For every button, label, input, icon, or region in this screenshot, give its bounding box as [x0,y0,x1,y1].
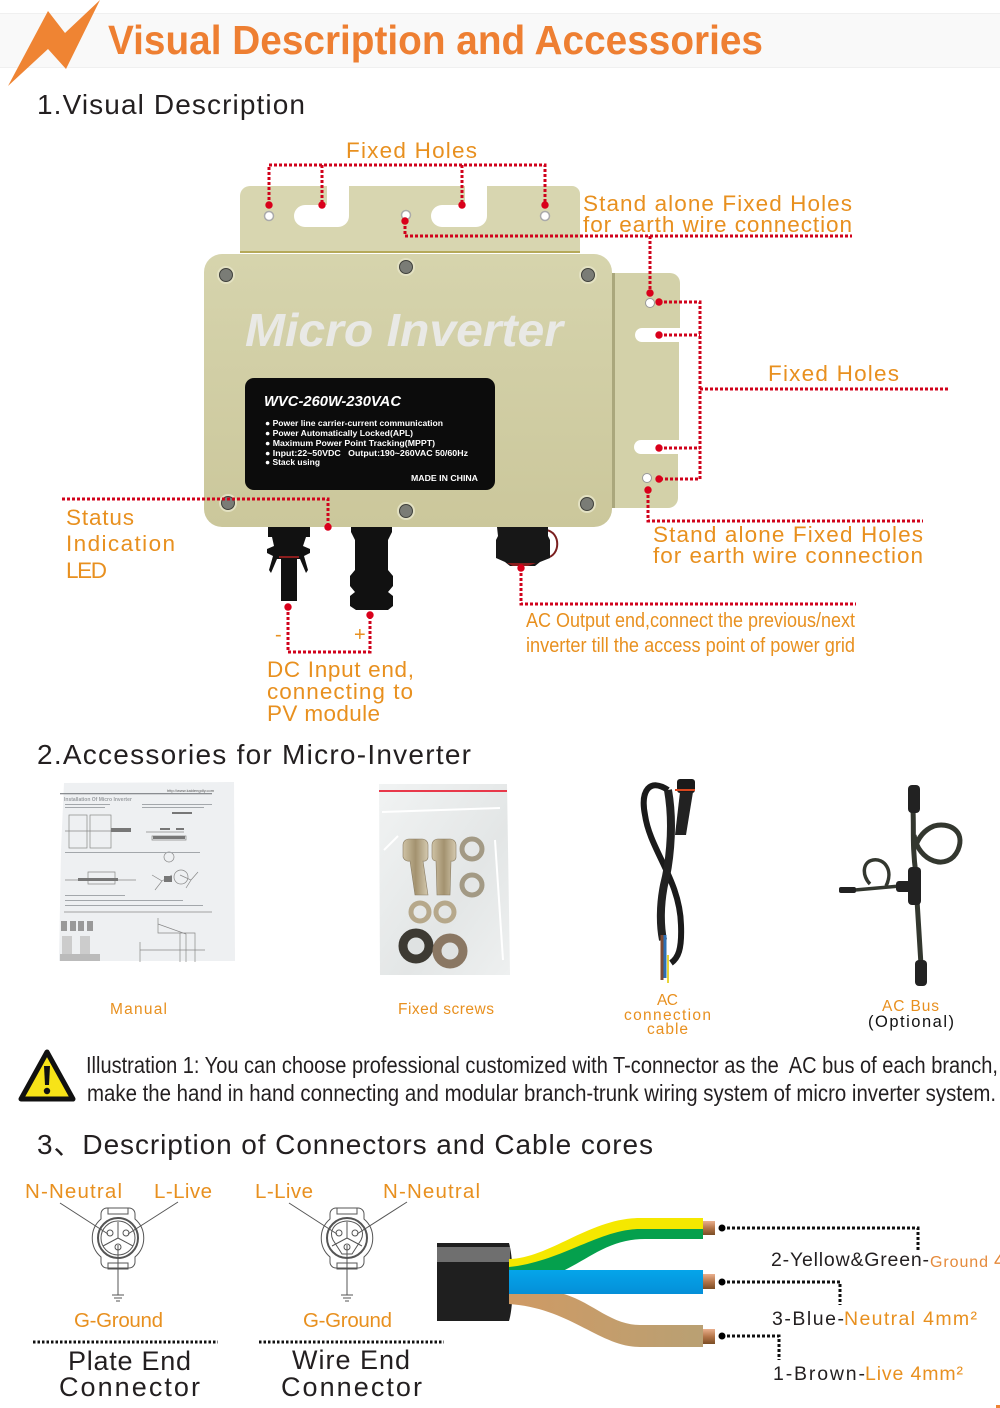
cable cross section [437,1218,1000,1385]
panel: plate end connector [25,1180,218,1402]
pin labels: G-Ground [74,1309,163,1332]
pin labels: N-Neutral [383,1180,480,1203]
label: blue: 3-Blue- [772,1308,844,1330]
connector: DC positive [267,527,310,601]
label: Fixed screws: Fixed screws [398,1001,494,1018]
callout: status LED [66,505,175,583]
photo: fixed screws bag [379,784,510,975]
callout: DC input: DC Input end, [267,657,414,682]
label: yellow green [771,1249,1000,1272]
nameplate: MADE IN CHINA [411,473,478,483]
callout: DC input: connecting to [267,679,413,704]
pin labels: G-Ground [303,1309,392,1332]
nameplate: WVC-260W-230VAC [264,394,402,410]
nameplate [245,378,495,490]
heading: 2.Accessories: 2.Accessories for Micro-Inverter [37,739,471,770]
nameplate: ● Stack using [265,457,320,467]
divider and caption [259,1342,444,1402]
pin labels [255,1180,480,1332]
inverter body [204,254,612,527]
callout: stand alone holes bottom: for earth wire connection [653,543,923,568]
leader lines: fixed holes and earth holes [62,165,948,652]
diagram: micro inverter [62,138,948,726]
bolts [403,839,456,895]
panel: wire end connector [255,1180,480,1402]
right mounting bracket [612,273,680,508]
connector: DC negative [350,527,393,610]
illustration note [86,1052,998,1106]
divider and caption: Wire End [292,1345,410,1375]
callout: AC output: inverter till the access point of power grid [526,634,855,657]
leader lines [718,1224,918,1360]
product name: Micro Inverter [245,304,565,356]
icon: warning triangle [21,1052,73,1099]
heading: 3 Description of Connectors: 3、Description of Connectors and Cable cores [37,1129,653,1160]
callout: stand alone holes top: Stand alone Fixed Holes [583,191,852,216]
label: AC Bus optional: (Optional) [868,1013,954,1031]
label: yellow green: 2-Yellow&Green- [771,1249,929,1271]
callout: stand alone holes bottom [653,522,923,568]
divider and caption: Plate End [68,1346,191,1376]
callout: polarity marks: - [275,624,282,646]
nameplate: ● Power Automatically Locked(APL) [265,428,413,438]
nameplate: ● Maximum Power Point Tracking(MPPT) [265,438,435,448]
black sheath [437,1243,513,1321]
title: Visual Description and Accessories [108,17,763,63]
label: AC connection cable [624,992,711,1038]
lock washers and nuts [411,839,482,921]
photo: AC bus [839,785,960,986]
callout: status LED: Indication [66,531,175,556]
icon: orange lightning bolt [8,0,100,86]
connector drawing [60,1202,178,1301]
callout: status LED: Status [66,505,134,530]
callout: stand alone holes top: for earth wire connection [583,212,852,237]
connector drawing [289,1202,407,1301]
label: AC connection cable: AC [657,992,678,1009]
label: brown: 1-Brown- [773,1363,865,1385]
photo: AC connection cable [644,779,695,983]
label: Manual: Manual [110,1001,167,1018]
top mounting bracket [240,186,580,253]
connector: AC output [496,527,557,566]
callout: status LED: LED [66,558,107,583]
callout: DC input: PV module [267,701,380,726]
pin labels: L-Live [154,1180,212,1203]
label: brown: Live 4mm² [865,1363,964,1385]
label: AC Bus optional [868,998,954,1031]
callout: right fixed holes: Fixed Holes [768,361,899,386]
callout: polarity marks [275,624,366,646]
screws [217,258,597,520]
callout: DC input [267,657,414,726]
header band [0,13,1000,68]
callout: polarity marks: + [354,624,366,646]
callout: stand alone holes bottom: Stand alone Fixed Holes [653,522,923,547]
photo: manual: http://www.kaidengdly.com [167,788,215,793]
photo: manual [59,782,235,962]
label: blue [772,1308,978,1330]
callout: AC output [526,609,855,657]
pin labels: L-Live [255,1180,313,1203]
pin labels: N-Neutral [25,1180,122,1203]
callout: AC output: AC Output end,connect the previous/next [526,609,855,632]
label: AC connection cable: cable [647,1021,688,1038]
callout: stand alone holes top [583,191,852,237]
heading: 1.Visual Description: 1.Visual Description [37,89,305,120]
yellow and green core [509,1218,715,1271]
label: brown [773,1363,964,1385]
blue core [509,1270,715,1294]
pin labels [25,1180,212,1332]
label: yellow green: Ground [930,1254,988,1271]
callout: top fixed holes: Fixed Holes [346,138,477,163]
label: AC connection cable: connection [624,1007,711,1024]
nameplate: ● Input:22~50VDC Output:190~260VAC 50/60Hz [265,448,468,458]
label: blue: Neutral 4mm² [844,1308,978,1330]
label: AC Bus optional: AC Bus [882,998,939,1015]
nameplate: ● Power line carrier-current communication [265,418,443,428]
divider and caption: Connector [59,1372,200,1402]
photo: manual: Installation Of Micro Inverter [64,797,132,803]
divider and caption: Connector [281,1372,422,1402]
divider and caption [33,1342,218,1402]
brown core [509,1293,715,1347]
